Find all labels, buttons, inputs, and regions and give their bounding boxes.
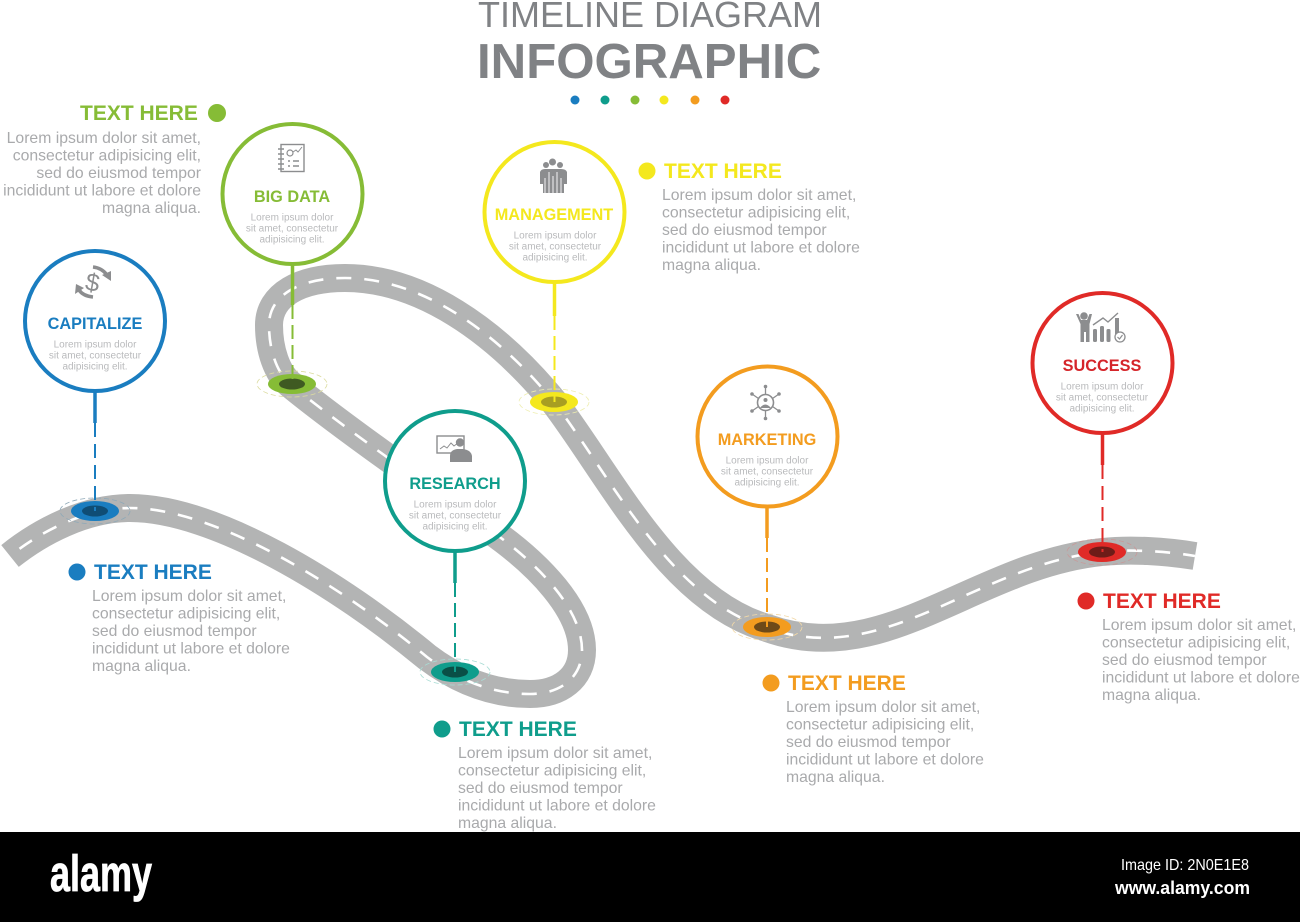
- heading: big data: BIG DATA: [254, 188, 330, 206]
- icon: data notebook: [278, 144, 304, 172]
- connector stem: success: [1101, 434, 1104, 552]
- text: success circle body: adipisicing elit.: [1069, 404, 1135, 414]
- text: big data circle body: Lorem ipsum dolor: [251, 212, 334, 224]
- circle: success: [1032, 293, 1172, 433]
- connector stem: marketing: [765, 508, 769, 627]
- text block: capitalize: magna aliqua.: [92, 658, 191, 675]
- circle: marketing: [698, 366, 838, 506]
- text block: marketing: TEXT HERE: [788, 672, 906, 695]
- text: management circle body: sit amet, consectetur: [509, 242, 602, 252]
- text: marketing circle body: Lorem ipsum dolor: [726, 456, 809, 466]
- text block: research: [434, 718, 656, 832]
- text block: capitalize: [68, 561, 290, 675]
- icon: dollar exchange: [75, 267, 111, 298]
- text block: management: TEXT HERE: [664, 160, 782, 183]
- text block: big data: incididunt ut labore et dolore: [3, 182, 201, 200]
- text: capitalize circle body: adipisicing elit.: [62, 362, 128, 372]
- road pin: research: [420, 659, 490, 685]
- text: big data circle body: sit amet, consectetur: [246, 224, 339, 234]
- text: management circle body: adipisicing elit.: [522, 252, 588, 264]
- text: management circle body: Lorem ipsum dolor: [514, 230, 597, 242]
- icon: person with rising chart: [1076, 312, 1125, 342]
- panel: management milestone: [484, 142, 624, 415]
- text block: research: incididunt ut labore et dolore: [458, 798, 656, 814]
- circle: big data: [222, 124, 362, 264]
- text: capitalize circle body: sit amet, consectetur: [49, 350, 142, 362]
- icon: network hub: [750, 385, 781, 420]
- panel: marketing milestone: [698, 366, 838, 640]
- road pin: success: [1067, 539, 1137, 565]
- text block: marketing: magna aliqua.: [786, 769, 885, 786]
- panel: research milestone: [385, 411, 525, 685]
- text block: big data: TEXT HERE: [80, 102, 198, 125]
- text: research circle body: [409, 500, 502, 532]
- text block: marketing: consectetur adipisicing elit,: [786, 716, 974, 734]
- text block: success: TEXT HERE: [1103, 590, 1221, 613]
- heading: research: RESEARCH: [409, 475, 501, 493]
- panel: success milestone: [1032, 293, 1172, 565]
- text block: capitalize: consectetur adipisicing elit,: [92, 606, 280, 622]
- text block: capitalize: TEXT HERE: [94, 561, 212, 584]
- text block: research: TEXT HERE: [459, 718, 577, 741]
- text: research circle body: adipisicing elit.: [422, 522, 488, 532]
- connector stem: management: [553, 283, 556, 402]
- text block: capitalize: Lorem ipsum dolor sit amet,: [92, 588, 286, 605]
- road pin: marketing: [732, 614, 802, 640]
- text: success circle body: sit amet, consectetur: [1056, 392, 1149, 404]
- footer: alamy watermark band: Image ID: 2N0E1E8: [1121, 857, 1249, 874]
- panel: big data milestone: [222, 124, 362, 397]
- text block: management: consectetur adipisicing elit,: [662, 204, 850, 222]
- icon: presenter with chart: [437, 436, 472, 462]
- footer: alamy watermark band: [0, 832, 1300, 922]
- text block: success: magna aliqua.: [1102, 687, 1201, 704]
- text: marketing circle body: adipisicing elit.: [734, 478, 800, 488]
- text block: marketing: Lorem ipsum dolor sit amet,: [786, 699, 980, 716]
- text: marketing circle body: sit amet, consectetur: [721, 466, 814, 478]
- text block: big data: Lorem ipsum dolor sit amet,: [7, 130, 201, 147]
- text block: big data: sed do eiusmod tempor: [36, 165, 201, 182]
- text block: big data: consectetur adipisicing elit,: [13, 148, 201, 164]
- text: marketing circle body: [721, 456, 814, 488]
- text block: research: magna aliqua.: [458, 815, 557, 832]
- circle: management: [484, 142, 624, 282]
- text block: management: [638, 160, 860, 274]
- icon: dollar exchange: $: [83, 268, 102, 298]
- connector stem: capitalize: [93, 392, 97, 511]
- road pin: management: [519, 389, 589, 415]
- heading: management: MANAGEMENT: [495, 206, 613, 224]
- heading: success: SUCCESS: [1063, 357, 1141, 375]
- text block: success: consectetur adipisicing elit,: [1102, 634, 1290, 652]
- heading: marketing: MARKETING: [718, 431, 816, 449]
- colour dots row: [570, 96, 730, 104]
- winding road: [10, 278, 1195, 694]
- title: [477, 0, 822, 89]
- text block: big data: [3, 102, 226, 217]
- text block: capitalize: sed do eiusmod tempor: [92, 623, 257, 640]
- text block: research: consectetur adipisicing elit,: [458, 762, 646, 780]
- text block: management: sed do eiusmod tempor: [662, 222, 827, 239]
- text block: marketing: incididunt ut labore et dolore: [786, 752, 984, 768]
- title: INFOGRAPHIC: [477, 34, 821, 89]
- text: research circle body: sit amet, consectetur: [409, 510, 502, 522]
- road pin: capitalize: [60, 498, 130, 524]
- footer: alamy watermark band: alamy: [50, 845, 152, 902]
- text block: capitalize: incididunt ut labore et dolore: [92, 640, 290, 658]
- text block: marketing: [762, 672, 984, 786]
- text: capitalize circle body: Lorem ipsum dolor: [54, 340, 137, 350]
- text: big data circle body: adipisicing elit.: [259, 234, 325, 246]
- footer: alamy watermark band: www.alamy.com: [1114, 878, 1250, 898]
- text: success circle body: [1056, 382, 1149, 414]
- text block: management: incididunt ut labore et dolore: [662, 240, 860, 256]
- text block: management: magna aliqua.: [662, 257, 761, 274]
- text block: success: incididunt ut labore et dolore: [1102, 670, 1300, 686]
- connector stem: big data: [291, 265, 294, 384]
- circle: capitalize: [25, 251, 165, 391]
- connector stem: research: [453, 552, 457, 672]
- text: research circle body: Lorem ipsum dolor: [414, 500, 497, 510]
- heading: capitalize: CAPITALIZE: [48, 315, 142, 333]
- text: capitalize circle body: [49, 340, 142, 372]
- text block: research: Lorem ipsum dolor sit amet,: [458, 745, 652, 762]
- text: success circle body: Lorem ipsum dolor: [1061, 382, 1144, 392]
- road pin: big data: [257, 371, 327, 397]
- text block: management: Lorem ipsum dolor sit amet,: [662, 187, 856, 204]
- text block: marketing: sed do eiusmod tempor: [786, 734, 951, 751]
- text block: success: Lorem ipsum dolor sit amet,: [1102, 617, 1296, 634]
- icon: team of people: [540, 158, 567, 193]
- text block: big data: magna aliqua.: [102, 200, 201, 217]
- text block: success: [1078, 590, 1300, 704]
- text block: success: sed do eiusmod tempor: [1102, 652, 1267, 669]
- panel: capitalize milestone: [25, 251, 165, 524]
- circle: research: [385, 411, 525, 551]
- text: big data circle body: [246, 212, 339, 246]
- text block: research: sed do eiusmod tempor: [458, 780, 623, 797]
- text: management circle body: [509, 230, 602, 264]
